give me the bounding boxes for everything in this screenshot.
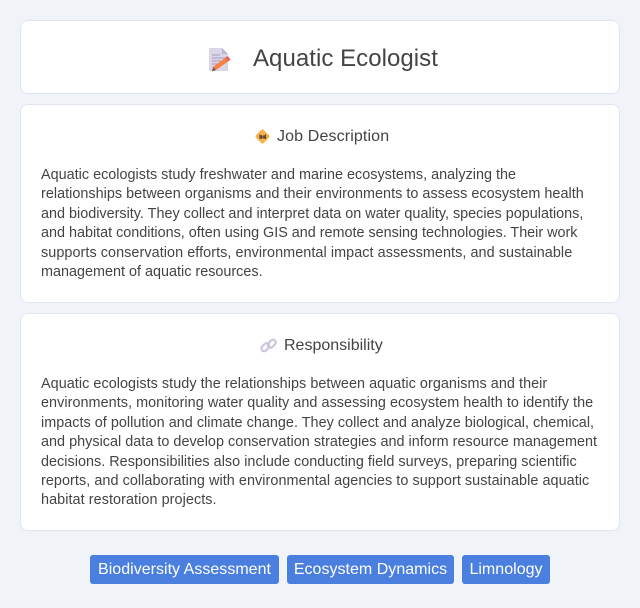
text block: job description: Aquatic ecologists study freshwater and marine ecosystems, analyzing the — [41, 167, 516, 183]
text block: responsibility — [41, 376, 597, 508]
icon: diamond sign — [256, 129, 270, 144]
panel: responsibility — [20, 313, 620, 531]
tag: biodiversity assessment — [90, 555, 279, 584]
text block: responsibility: impacts of pollution and climate change. They collect and analyze biological, chemical, — [41, 415, 594, 431]
heading: responsibility: Responsibility — [284, 337, 383, 354]
tag: biodiversity assessment: Biodiversity Assessment — [98, 561, 271, 578]
text block: responsibility: reports, and collaborating with environmental agencies to support sustainable aquatic — [41, 473, 589, 489]
panel: title card — [20, 20, 620, 94]
text block: job description: management of aquatic resources. — [41, 264, 263, 280]
panel: job description — [20, 104, 620, 303]
text block: job description: and habitat conditions, often using GIS and remote sensing technologies. Their work — [41, 225, 577, 241]
text block: responsibility: decisions. Responsibilities also include conducting field surveys, preparing scientific — [41, 454, 577, 470]
text block: job description: supports conservation efforts, environmental impact assessments, and sustainable — [41, 245, 572, 261]
title: Aquatic Ecologist — [253, 45, 438, 72]
tag: limnology — [462, 555, 550, 584]
tag: limnology: Limnology — [469, 561, 543, 578]
icon: chain link — [260, 338, 277, 352]
tag: ecosystem dynamics — [287, 555, 454, 584]
text block: responsibility: and physical data to develop conservation strategies and inform resource management — [41, 434, 597, 450]
text block: job description: relationships between organisms and their environments to assess ecosystem health — [41, 186, 584, 202]
tag: ecosystem dynamics: Ecosystem Dynamics — [294, 561, 447, 578]
text block: job description: and biodiversity. They collect and interpret data on water quality, species populations, — [41, 206, 583, 222]
heading: job description: Job Description — [277, 128, 389, 145]
icon: document with pencil — [209, 48, 230, 72]
text block: job description — [41, 167, 584, 280]
text block: responsibility: habitat restoration projects. — [41, 492, 217, 508]
text block: responsibility: Aquatic ecologists study the relationships between aquatic organisms and their — [41, 376, 547, 392]
text block: responsibility: environments, monitoring water quality and assessing ecosystem health to identify the — [41, 395, 593, 411]
